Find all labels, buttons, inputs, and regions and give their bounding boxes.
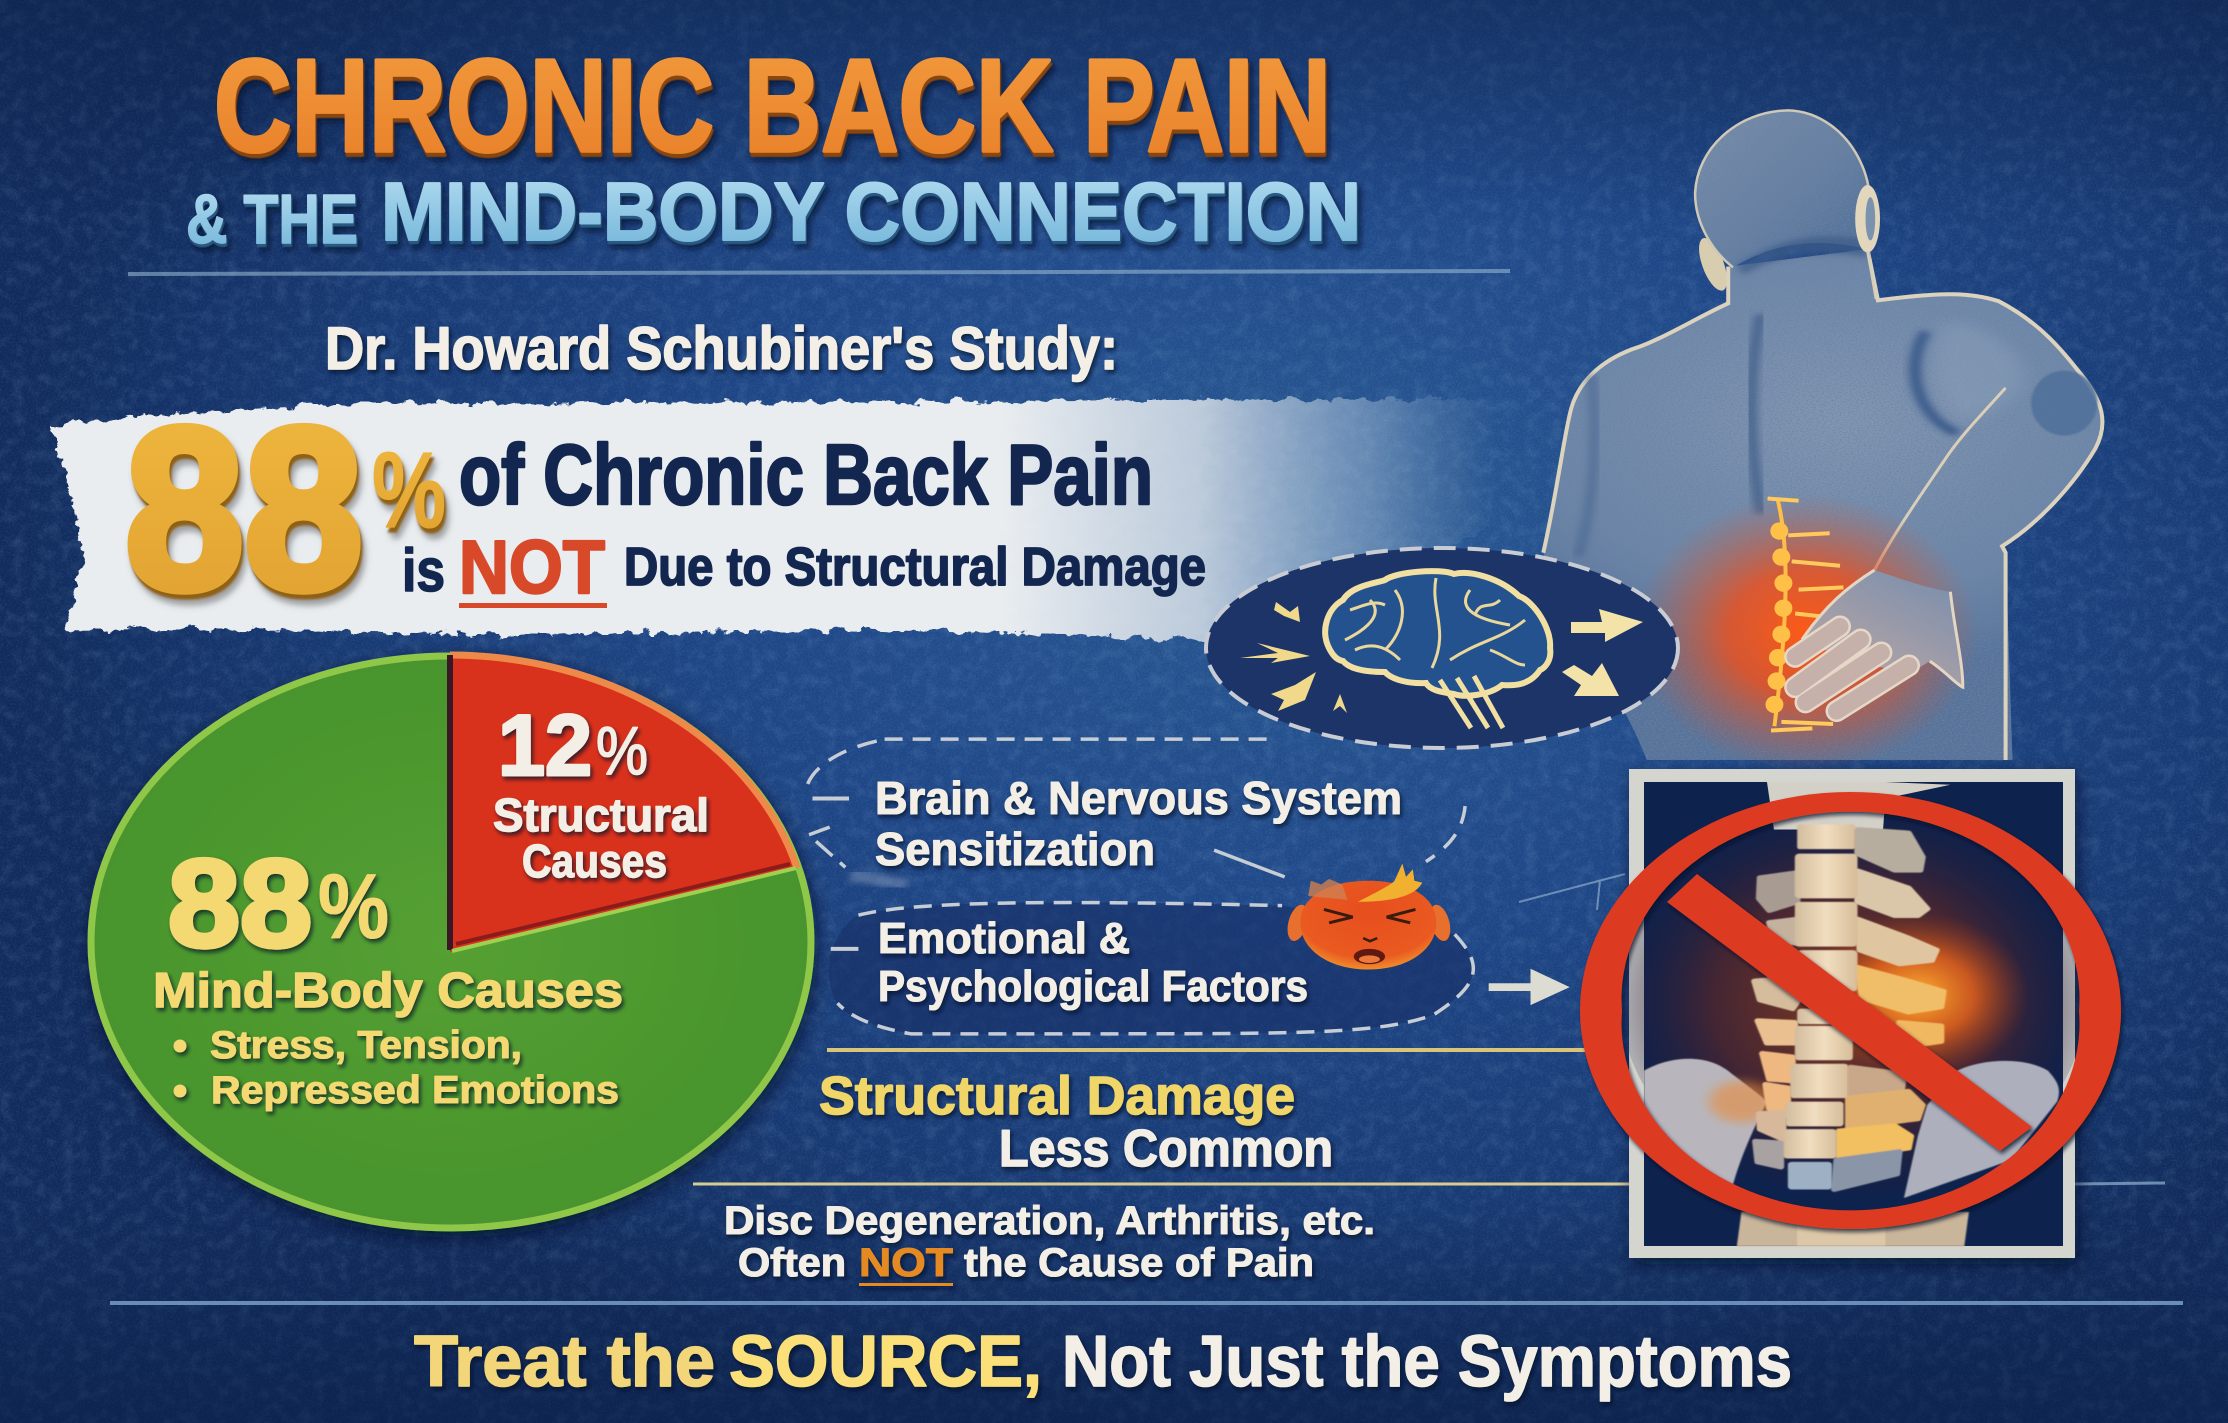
left ear xyxy=(1693,237,1733,292)
torso and arm xyxy=(1543,249,2102,760)
banner line 2: NOT xyxy=(459,525,605,609)
icon: prohibition sign xyxy=(1580,792,2121,1229)
disc degeneration text: Often xyxy=(738,1241,846,1285)
bullet list: Repressed Emotions xyxy=(211,1069,619,1112)
callout text: emotional factors xyxy=(878,914,1308,1011)
pie label: 88 percent mind-body xyxy=(153,835,623,1112)
banner line 2: Due to Structural Damage xyxy=(624,537,1206,597)
icon: outgoing arrows xyxy=(1562,609,1643,696)
callout: emotional factors panel xyxy=(829,903,1473,1034)
callout text: brain sensitization: Brain & Nervous System xyxy=(875,772,1402,824)
callout text: emotional factors: Emotional & xyxy=(878,914,1130,963)
brain nervous system ellipse xyxy=(1206,548,1678,748)
pie label: 12 percent structural: Structural xyxy=(493,789,709,841)
banner line 2: is xyxy=(402,537,445,604)
neck section xyxy=(1767,782,1950,830)
structural damage text: Structural Damage xyxy=(819,1066,1295,1126)
banner line 2 xyxy=(402,525,1206,609)
fingers xyxy=(1795,626,1909,711)
body shading xyxy=(1578,236,2097,570)
callout outline: emotional factors xyxy=(831,903,1473,1034)
icon: incoming arrows xyxy=(1240,602,1347,713)
title line 2: MIND-BODY CONNECTION xyxy=(381,165,1361,258)
pie label: 12 percent structural: 12 xyxy=(498,698,592,794)
structural damage text xyxy=(819,1066,1333,1178)
torn paper banner xyxy=(52,380,1500,640)
big 88 percent: % xyxy=(372,429,446,550)
disc degeneration text: the Cause of Pain xyxy=(964,1241,1314,1285)
callout text: emotional factors: Psychological Factors xyxy=(878,962,1308,1011)
big 88 percent: 88 xyxy=(125,380,363,637)
spine illustration xyxy=(1621,782,2085,1246)
bullet list: Stress, Tension, xyxy=(210,1024,522,1067)
icon: brain xyxy=(1325,571,1550,728)
pie label: 88 percent mind-body: Mind-Body Causes xyxy=(153,964,623,1018)
bottom tagline: Treat the xyxy=(414,1322,715,1402)
callout text: brain sensitization: Sensitization xyxy=(875,823,1155,875)
vertebra processes xyxy=(1754,830,1943,1189)
green slice xyxy=(91,656,811,1228)
disc degeneration text: Disc Degeneration, Arthritis, etc. xyxy=(724,1199,1375,1243)
icon: stressed face xyxy=(1284,864,1454,970)
pie chart xyxy=(91,655,811,1228)
pie label: 88 percent mind-body: % xyxy=(318,856,389,958)
arrow to spine xyxy=(1489,969,1570,1005)
bottom tagline: Not Just the Symptoms xyxy=(1062,1322,1792,1402)
callout text: brain sensitization xyxy=(875,772,1402,875)
right ear xyxy=(1855,185,1880,299)
person holding lower back xyxy=(1543,110,2102,772)
glowing spine xyxy=(1765,499,1843,731)
disc degeneration text: NOT xyxy=(859,1241,953,1285)
title line 2 prefix: & THE xyxy=(186,180,358,258)
frame xyxy=(1629,769,2075,1258)
callout outline: brain and nervous system xyxy=(806,739,1465,885)
pie label: 12 percent structural xyxy=(493,698,709,887)
pie label: 88 percent mind-body: 88 xyxy=(168,835,312,973)
vertebrae xyxy=(1783,824,1885,1246)
disc degeneration text xyxy=(724,1199,1375,1286)
pain glow xyxy=(1633,494,1978,772)
red slice xyxy=(450,655,797,952)
pelvis xyxy=(1644,1059,2059,1246)
bottom tagline xyxy=(414,1322,1792,1402)
pie label: 12 percent structural: % xyxy=(596,713,648,789)
structural damage text: Less Common xyxy=(999,1120,1333,1178)
hand on lower back xyxy=(1795,570,1963,711)
pie label: 12 percent structural: Causes xyxy=(522,835,667,887)
head xyxy=(1695,110,1871,267)
bullet list xyxy=(174,1024,619,1112)
bottom tagline: SOURCE, xyxy=(729,1322,1042,1402)
callouts: mechanisms xyxy=(806,739,1570,1034)
title xyxy=(186,32,1361,258)
banner line 1: of Chronic Back Pain xyxy=(459,428,1153,523)
study heading: Dr. Howard Schubiner's Study: xyxy=(325,315,1118,382)
spine x-ray with prohibition sign xyxy=(1519,769,2121,1258)
title line 1: CHRONIC BACK PAIN xyxy=(214,32,1331,179)
